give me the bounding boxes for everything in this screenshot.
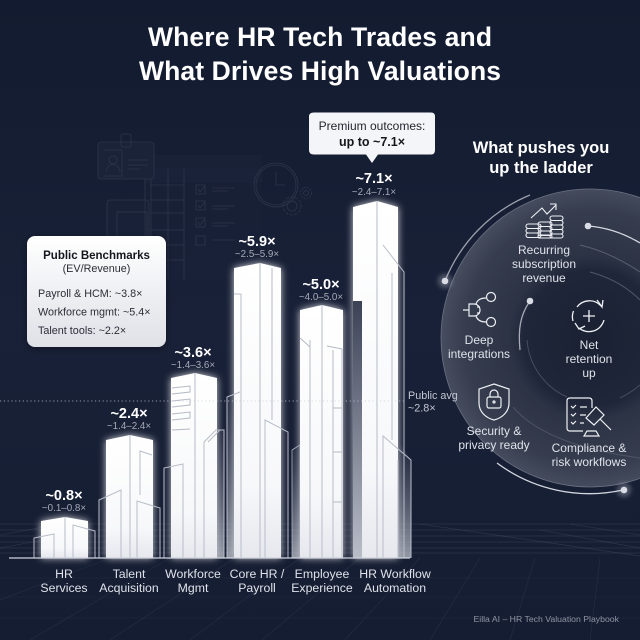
value labels: ~4.0–5.0× <box>299 292 343 303</box>
label: security and privacy ready: privacy ready <box>458 438 530 452</box>
heading: what pushes you up the ladder: What pushes you <box>473 139 609 157</box>
value labels: ~7.1× <box>355 171 393 187</box>
icon: security shield <box>479 384 509 420</box>
icon: plug integrations <box>463 292 496 326</box>
category labels: Mgmt <box>178 581 209 595</box>
footer credit: Eilla AI – HR Tech Valuation Playbook <box>473 614 620 624</box>
label: recurring subscription revenue: revenue <box>522 271 566 285</box>
value labels: ~3.6× <box>174 345 212 361</box>
category labels: Experience <box>291 581 353 595</box>
value labels: ~5.0× <box>302 277 340 293</box>
category labels: Talent <box>113 567 146 581</box>
value labels <box>42 171 396 514</box>
category labels <box>40 567 431 595</box>
value labels: ~0.8× <box>45 488 83 504</box>
heading: what pushes you up the ladder <box>473 139 609 177</box>
icon: net retention cycle <box>572 300 604 332</box>
label: deep integrations: integrations <box>448 347 510 361</box>
category labels: Payroll <box>238 581 276 595</box>
label: deep integrations: Deep <box>465 333 494 347</box>
value labels: ~2.4–7.1× <box>352 187 396 198</box>
label: compliance and risk workflows: risk workflows <box>552 455 626 469</box>
value labels: ~2.4× <box>110 406 148 422</box>
callout: premium outcomes: Premium outcomes: <box>319 119 425 133</box>
arcs with nodes <box>445 195 640 494</box>
value labels: ~5.9× <box>238 234 276 250</box>
title: What Drives High Valuations <box>139 56 501 86</box>
label: net retention up: up <box>582 366 596 380</box>
title <box>139 22 501 86</box>
label: recurring subscription revenue: subscription <box>512 257 576 271</box>
baseline <box>9 557 410 559</box>
callout: public benchmarks: Talent tools: ~2.2× <box>38 325 126 337</box>
building: HR Workflow Automation <box>353 201 411 558</box>
callout: public benchmarks <box>27 236 166 347</box>
label: security and privacy ready <box>458 424 530 452</box>
category labels: Employee <box>295 567 349 581</box>
label: deep integrations <box>448 333 510 361</box>
icon: coins and growth arrow <box>526 204 563 238</box>
title: Where HR Tech Trades and <box>148 22 492 52</box>
label: compliance and risk workflows: Compliance & <box>552 441 626 455</box>
callout: public benchmarks: Public Benchmarks <box>43 250 150 262</box>
icon: compliance checklist and gavel <box>567 398 611 436</box>
label: recurring subscription revenue: Recurring <box>518 243 570 257</box>
building: Workforce Mgmt <box>164 373 224 558</box>
callout: public benchmarks: Payroll & HCM: ~3.8× <box>38 288 142 300</box>
public average label: ~2.8× <box>408 402 436 414</box>
panel: drivers disc <box>438 189 640 497</box>
label: security and privacy ready: Security & <box>467 424 521 438</box>
label: net retention up: Net <box>580 338 599 352</box>
heading: what pushes you up the ladder: up the ladder <box>489 159 593 177</box>
category labels: Core HR / <box>230 567 285 581</box>
public average line <box>0 400 405 402</box>
value labels: ~1.4–2.4× <box>107 421 151 432</box>
label: net retention up <box>566 338 612 380</box>
building: HR Services <box>34 517 95 558</box>
callout: public benchmarks: (EV/Revenue) <box>63 263 130 275</box>
category labels: HR Workflow <box>359 567 431 581</box>
category labels: Acquisition <box>99 581 159 595</box>
background illustration: HR software <box>98 134 312 280</box>
building: Talent Acquisition <box>99 435 160 558</box>
floor grid <box>0 524 640 640</box>
building: Core HR / Payroll <box>227 263 288 558</box>
value labels: ~0.1–0.8× <box>42 503 86 514</box>
callout: public benchmarks: Workforce mgmt: ~5.4× <box>38 306 151 318</box>
callout: premium outcomes <box>309 112 435 163</box>
label: recurring subscription revenue <box>512 243 576 285</box>
public average label: Public avg <box>408 390 458 402</box>
value labels: ~2.5–5.9× <box>235 249 279 260</box>
building: Employee Experience <box>292 305 343 558</box>
value labels: ~1.4–3.6× <box>171 360 215 371</box>
category labels: Automation <box>364 581 426 595</box>
category labels: Workforce <box>165 567 221 581</box>
callout: premium outcomes: up to ~7.1× <box>339 135 405 149</box>
public average label <box>408 390 458 414</box>
label: net retention up: retention <box>566 352 612 366</box>
label: compliance and risk workflows <box>552 441 626 469</box>
category labels: Services <box>40 581 88 595</box>
category labels: HR <box>55 567 73 581</box>
